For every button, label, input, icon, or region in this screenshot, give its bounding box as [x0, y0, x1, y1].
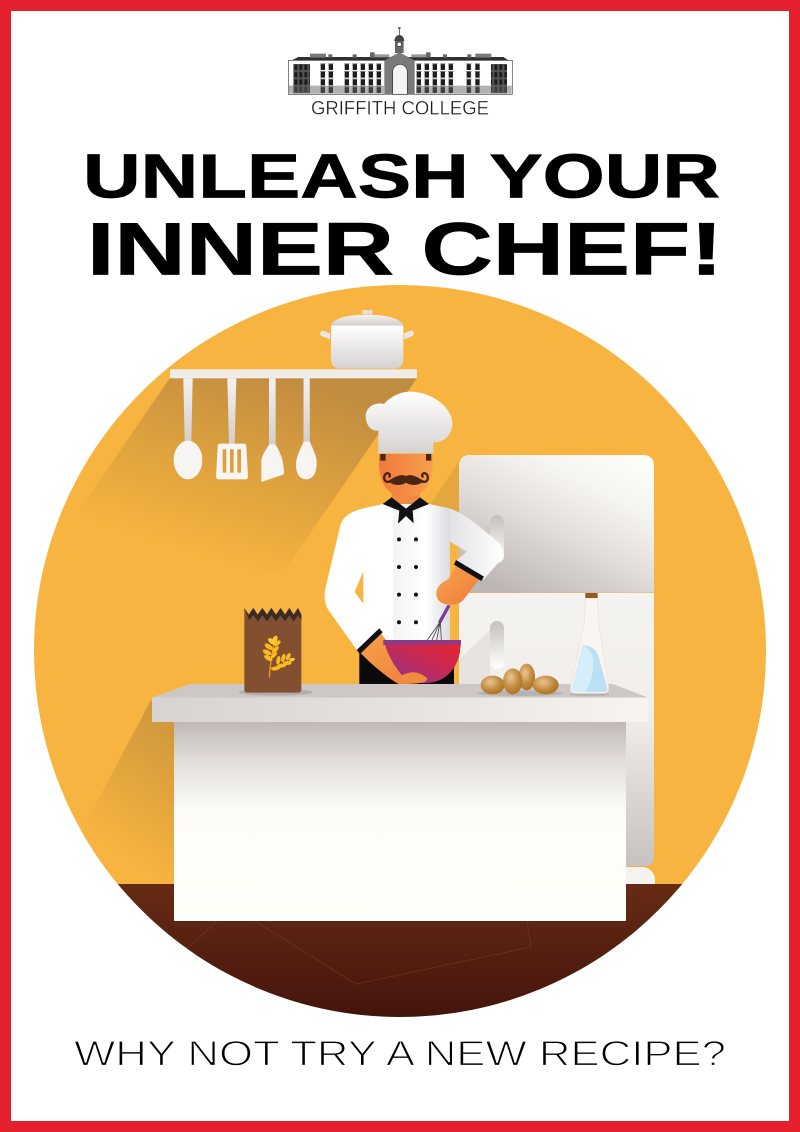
neck	[392, 490, 420, 511]
title: INNER CHEF!	[87, 208, 723, 290]
face	[379, 454, 433, 497]
eggs	[481, 664, 559, 694]
ladle	[174, 378, 202, 479]
left hand fingers	[398, 672, 427, 684]
floor outline	[188, 921, 531, 984]
shelf board	[170, 369, 417, 378]
turner	[261, 378, 284, 482]
left arm	[325, 508, 382, 651]
fridge	[459, 455, 655, 884]
bowl	[383, 640, 461, 683]
tagline: WHY NOT TRY A NEW RECIPE?	[74, 1034, 726, 1074]
slotted spatula	[216, 378, 248, 479]
floor	[118, 884, 682, 1017]
chef	[325, 392, 503, 684]
right hand	[436, 565, 479, 605]
fridge lower handle	[490, 621, 504, 669]
left hand	[358, 632, 427, 684]
wheat icon	[262, 635, 295, 677]
eggs and bottle	[477, 593, 609, 696]
torso	[363, 504, 450, 640]
icon: college building	[288, 27, 512, 94]
shelf shadow	[35, 378, 417, 600]
moustache	[384, 473, 428, 485]
left cuff	[357, 628, 383, 654]
title	[83, 142, 723, 290]
right cuff	[454, 560, 484, 581]
counter shadow	[80, 700, 174, 884]
pot	[320, 310, 414, 369]
bottle	[569, 593, 609, 696]
sideburns	[380, 454, 431, 461]
counter body	[174, 722, 626, 921]
kitchen counter	[152, 684, 648, 921]
chef hat	[366, 392, 452, 453]
fridge foot	[626, 867, 655, 884]
fridge upper door	[459, 455, 654, 592]
egg shadow	[477, 691, 563, 696]
whisk	[427, 607, 448, 640]
collar	[383, 497, 429, 524]
flour bag	[239, 608, 312, 696]
counter top face	[152, 684, 648, 698]
fridge lower door	[459, 593, 654, 866]
wall	[34, 285, 766, 885]
fridge upper handle	[490, 515, 504, 563]
right arm	[449, 508, 503, 580]
buttons	[397, 537, 418, 624]
wooden spoon	[296, 378, 317, 479]
apron	[359, 650, 454, 684]
kitchen illustration circle	[34, 285, 766, 1019]
title: UNLEASH YOUR	[83, 142, 720, 212]
shelf with utensils	[170, 310, 417, 482]
counter front lip	[152, 698, 648, 722]
logo: Griffith College	[288, 27, 512, 120]
fridge shadow on wall	[430, 460, 460, 512]
logo wordmark: GRIFFITH COLLEGE	[311, 98, 489, 120]
